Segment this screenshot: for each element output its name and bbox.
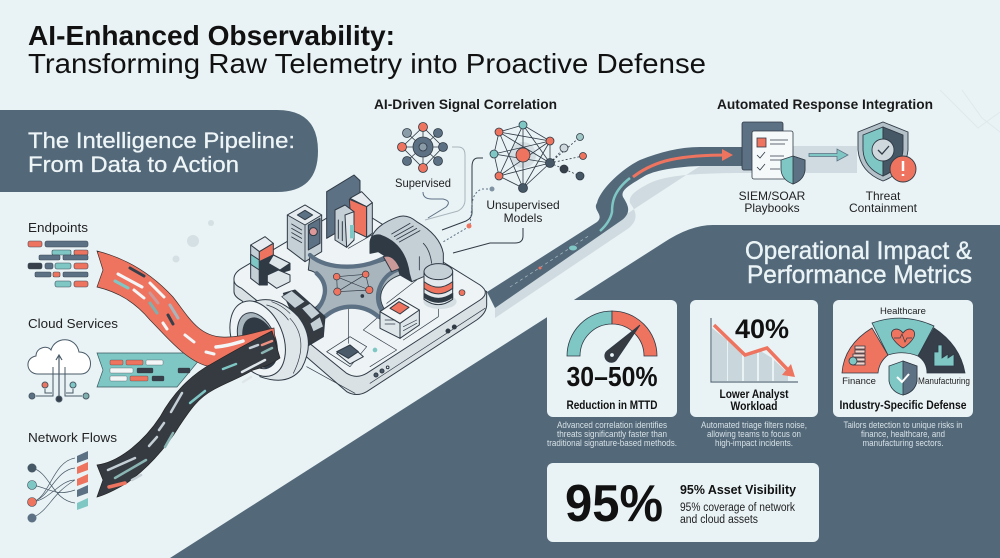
panel: metrics background — [170, 225, 1000, 558]
gauge — [567, 311, 657, 362]
title: AI-Enhanced Observability: — [28, 20, 395, 51]
heading: Operational Impact — [745, 237, 972, 289]
cloud stream data blocks — [110, 360, 190, 381]
card: analyst workload — [690, 300, 818, 417]
sector fan — [842, 318, 965, 395]
declining chart — [711, 318, 798, 382]
text: industry description: finance, healthcare, and — [861, 429, 945, 440]
card: asset visibility: 95% — [565, 475, 663, 533]
icon: network flows — [28, 451, 88, 522]
heading: Operational Impact: Performance Metrics — [747, 261, 972, 289]
card: asset visibility: 95% Asset Visibility — [680, 482, 797, 497]
card: analyst workload: 40% — [735, 314, 789, 344]
labels: response stages: Playbooks — [744, 201, 800, 215]
card: analyst workload: Workload — [730, 399, 778, 413]
back panel — [327, 175, 372, 247]
arrow: playbook to containment — [809, 149, 848, 161]
text: workload description — [701, 420, 807, 449]
label: Cloud Services: Cloud Services — [28, 316, 119, 331]
platform — [234, 206, 487, 394]
processing cube — [380, 298, 419, 338]
network: supervised — [398, 122, 448, 172]
label: Supervised: Supervised — [395, 176, 451, 190]
labels: response stages: Containment — [849, 201, 918, 215]
icon: threat containment shield — [858, 122, 916, 182]
labels: response stages: SIEM/SOAR — [739, 189, 806, 203]
label: Network Flows: Network Flows — [28, 430, 118, 445]
card: MTTD reduction — [547, 300, 677, 417]
card: industry defense — [833, 300, 973, 417]
stream: cloud services — [97, 353, 205, 387]
text: industry description — [844, 420, 962, 449]
label: Unsupervised Models: Models — [504, 211, 542, 225]
small module — [251, 237, 290, 288]
card: industry defense: Finance — [842, 376, 876, 387]
card: asset visibility — [547, 463, 819, 542]
card: industry defense: Manufacturing — [918, 376, 970, 387]
title — [28, 20, 706, 79]
text: MTTD description — [547, 420, 677, 449]
text: MTTD description: threats significantly faster than — [557, 429, 667, 440]
labels: response stages — [739, 189, 918, 215]
text: workload description: high-impact incidents. — [715, 438, 793, 449]
arch gateway — [370, 216, 443, 282]
heading: Automated Response Integration: Automated Response Integration — [717, 96, 933, 112]
text: MTTD description: traditional signature-based methods. — [547, 438, 677, 449]
labels: response stages: Threat — [866, 189, 901, 203]
central machine — [219, 175, 487, 394]
label: Unsupervised Models: Unsupervised — [486, 198, 560, 212]
icon: SIEM/SOAR playbook — [742, 122, 805, 184]
panel: pipeline heading pill: The Intelligence Pipeline: — [28, 128, 295, 153]
text: workload description: Automated triage filters noise, — [701, 420, 807, 431]
server tower — [287, 205, 322, 262]
network: unsupervised — [490, 121, 586, 192]
panel: pipeline heading pill: From Data to Action — [28, 152, 239, 177]
road to response stage — [487, 146, 857, 318]
stream: network flows — [97, 331, 280, 497]
label: Endpoints: Endpoints — [28, 220, 89, 235]
star routing junction — [308, 253, 407, 320]
card: MTTD reduction: 30–50% — [566, 361, 658, 392]
decorative hexagons — [172, 220, 214, 262]
database cylinder — [423, 264, 457, 309]
icon: endpoint log blocks — [28, 241, 88, 287]
title: Transforming Raw Telemetry into Proactive Defense — [28, 48, 706, 79]
card: asset visibility: 95% coverage of network — [680, 502, 795, 514]
heading: Operational Impact: Operational Impact & — [745, 237, 972, 265]
card: industry defense: Healthcare — [880, 306, 926, 317]
connector lines — [423, 147, 523, 253]
label: Unsupervised Models — [486, 198, 560, 225]
chip — [337, 345, 377, 364]
intake ring — [219, 290, 325, 385]
icon: cloud services — [28, 340, 91, 402]
text: MTTD description: Advanced correlation identifies — [557, 420, 667, 431]
card: MTTD reduction: Reduction in MTTD — [566, 398, 658, 412]
text: workload description: allowing teams to focus on — [707, 429, 801, 440]
card: industry defense: Industry-Specific Defense — [840, 398, 967, 412]
card: analyst workload: Lower Analyst — [720, 387, 788, 401]
text: industry description: Tailors detection to unique risks in — [844, 420, 962, 431]
card: asset visibility: and cloud assets — [680, 514, 758, 526]
panel: pipeline heading pill — [0, 110, 318, 192]
stream: endpoints — [97, 251, 276, 366]
text: industry description: manufacturing sectors. — [862, 438, 944, 449]
heading: AI-Driven Signal Correlation: AI-Driven Signal Correlation — [374, 96, 557, 112]
